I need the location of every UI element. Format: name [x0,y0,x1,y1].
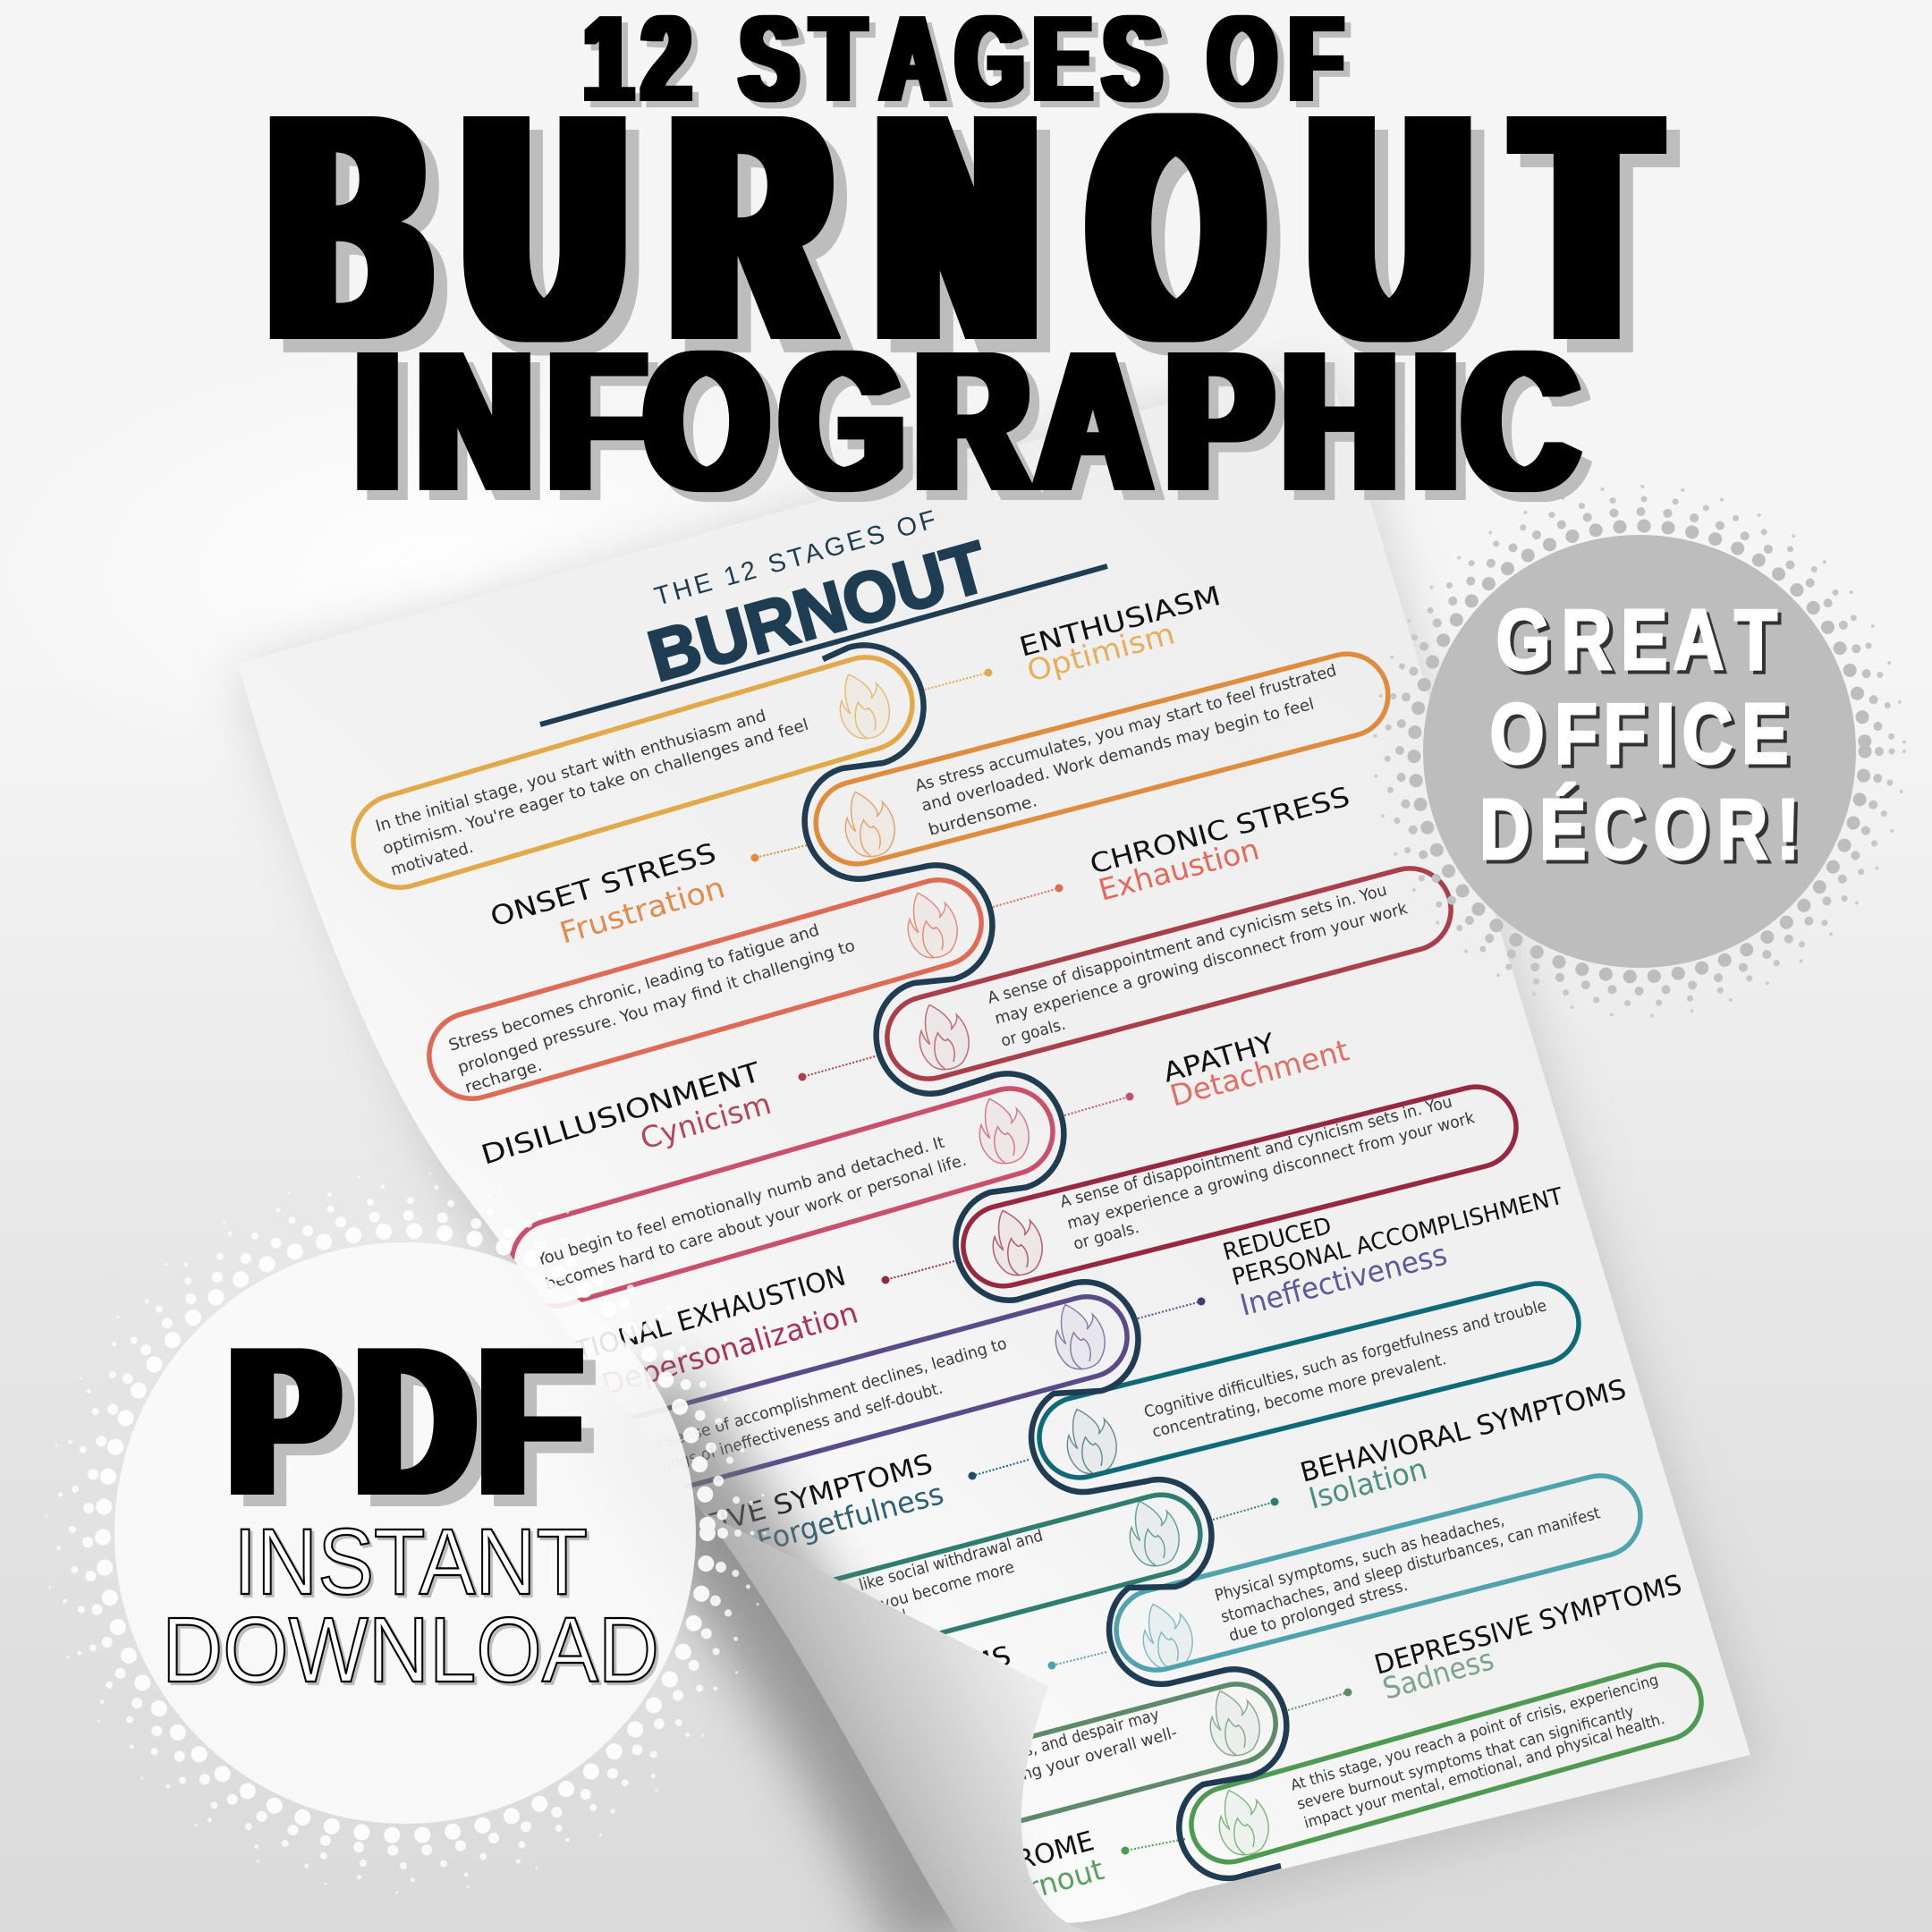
stage 10: physical symptoms: stomachaches, and sleep disturbances, can manifest [1219,1504,1602,1627]
stage 11: depressive symptoms [748,1569,1685,1887]
paper heading: BURNOUT [640,526,996,696]
stage 6: emotional exhaustion: may experience a growing disconnect from your work [1065,1108,1477,1233]
badge text [1479,592,1800,877]
stage 2: onset stress: Frustration [555,869,729,951]
stage 5: apathy: becomes hard to care about your work or personal life. [543,1151,969,1294]
stage 3: chronic stress: Exhaustion [1095,831,1263,908]
stage 1: enthusiasm: motivated. [388,838,476,880]
fold shadow [626,1395,957,1932]
badge: great office decor [1375,487,1904,1016]
title line: burnout: BURNOUT [274,48,1651,407]
stage 11: depressive symptoms: DEPRESSIVE SYMPTOMS [1371,1569,1685,1682]
stage 2: onset stress: As stress accumulates, you may start to feel frustrated [913,661,1339,796]
stage 10: physical symptoms: Physical symptoms, such as headaches, [1213,1511,1506,1606]
stage 3: chronic stress: prolonged pressure. You may find it challenging to [455,936,857,1078]
stage 11: depressive symptoms: Sadness [1378,1641,1497,1707]
stage 3: chronic stress [419,782,1353,1109]
badge text: DÉCOR! [1479,782,1800,877]
stage 9: behavioral symptoms: Behavioral changes, like social withdrawal and [708,1527,1045,1636]
stage 7: reduced personal accomplishment: PERSONAL ACCOMPLISHMENT [1229,1183,1566,1292]
stage 4: disillusionment: DISILLUSIONMENT [478,1056,765,1172]
stage 12: burnout syndrome: At this stage, you reach a point of crisis, experiencing [1289,1671,1660,1795]
stage 6: emotional exhaustion: A sense of disappointment and cynicism sets in. You [1058,1092,1454,1212]
main title [274,0,1651,531]
stage 1: enthusiasm: In the initial stage, you start with enthusiasm and [374,707,768,836]
stage 8: cognitive symptoms [606,1275,1588,1568]
stage 1: enthusiasm: ENTHUSIASM [1016,580,1224,664]
stage 5: apathy: Detachment [1166,1032,1352,1114]
stage 9: behavioral symptoms: BEHAVIORAL SYMPTOMS [1297,1374,1630,1489]
stage 4: disillusionment: A sense of disappointment and cynicism sets in. You [986,881,1389,1008]
stage 9: behavioral symptoms: Isolation [1305,1451,1430,1516]
paper shadow [238,368,1758,1932]
paper heading: THE 12 STAGES OF [651,505,939,612]
stage 10: physical symptoms: PHYSICAL SYMPTOMS [708,1640,1014,1750]
stage 7: reduced personal accomplishment: Ineffectiveness [1236,1236,1451,1323]
stage 5: apathy: You begin to feel emotionally numb and detached. It [534,1133,946,1270]
stage 1: enthusiasm [342,580,1224,899]
stage 4: disillusionment [478,860,1460,1172]
stage 2: onset stress: burdensome. [927,792,1039,840]
stage 4: disillusionment: may experience a growing disconnect from your work [993,899,1410,1029]
badge: pdf instant download [46,1174,765,1893]
stage 12: burnout syndrome: severe burnout symptoms that can significantly [1295,1703,1636,1814]
stage 12: burnout syndrome [805,1656,1710,1932]
stage 8: cognitive symptoms: COGNITIVE SYMPTOMS [606,1448,936,1568]
stage 5: apathy [502,1028,1352,1316]
stage 8: cognitive symptoms: Forgetfulness [753,1476,947,1559]
curled page flap [702,1512,1087,1932]
stage 1: enthusiasm: Optimism [1023,615,1178,689]
stage 9: behavioral symptoms [664,1374,1630,1701]
stage 6: emotional exhaustion: EMOTIONAL EXHAUSTION [514,1260,849,1385]
stage 1: enthusiasm: optimism. You're eager to take on challenges and feel [380,716,810,859]
badge text: GREAT [1496,592,1777,688]
stage 12: burnout syndrome: Burnout [986,1852,1107,1916]
stage 8: cognitive symptoms: concentrating, become more prevalent. [1150,1350,1448,1442]
instant download label: DOWNLOAD [162,1598,659,1701]
stage 3: chronic stress: recharge. [462,1056,545,1097]
stage 9: behavioral symptoms: detached. [843,1606,913,1641]
stage 11: depressive symptoms: develop, affecting your overall well- [902,1724,1179,1817]
pdf label: PDF [230,1304,580,1538]
stage 6: emotional exhaustion: or goals. [1072,1218,1141,1254]
instant download label: INSTANT [233,1510,588,1614]
stage 6: emotional exhaustion [514,1079,1525,1402]
stage 11: depressive symptoms: Feelings of sadness, hopelessness, and despair may [790,1705,1162,1825]
instant download label [162,1510,659,1701]
stage 7: reduced personal accomplishment: REDUCED [1220,1213,1335,1267]
stage 3: chronic stress: Stress becomes chronic, leading to fatigue and [446,921,821,1055]
stage 6: emotional exhaustion: Depersonalization [597,1295,861,1402]
stage 2: onset stress [487,645,1397,951]
stage 7: reduced personal accomplishment: Your sense of accomplishment declines, leading to [628,1335,1009,1462]
stage 2: onset stress: and overloaded. Work demands may begin to feel [919,695,1316,816]
stage 9: behavioral symptoms: irritability, may emerge as you become more [681,1558,1016,1671]
stage 7: reduced personal accomplishment: feelings of ineffectiveness and self-doubt. [638,1379,945,1482]
stage 12: burnout syndrome: BURNOUT SYNDROME [805,1826,1097,1932]
badge text: OFFICE [1490,686,1789,782]
stage 3: chronic stress: CHRONIC STRESS [1087,782,1353,881]
stage 8: cognitive symptoms: Cognitive difficulties, such as forgetfulness and trouble [1142,1296,1548,1422]
stage 4: disillusionment: Cynicism [636,1086,775,1157]
stage 4: disillusionment: or goals. [999,1015,1068,1051]
stage 10: physical symptoms [708,1467,1649,1750]
panel: infographic paper sheet [238,359,1750,1932]
stage 5: apathy: APATHY [1160,1028,1279,1089]
stage 7: reduced personal accomplishment [592,1183,1566,1506]
winding navy path [805,645,1286,1878]
title line: infographic: INFOGRAPHIC [356,311,1578,531]
stage 12: burnout syndrome: impact your mental, emotional, and physical health. [1302,1710,1667,1833]
stage 10: physical symptoms: due to prolonged stress. [1227,1576,1410,1646]
paper heading [540,505,1107,724]
stage 2: onset stress: ONSET STRESS [487,837,720,934]
